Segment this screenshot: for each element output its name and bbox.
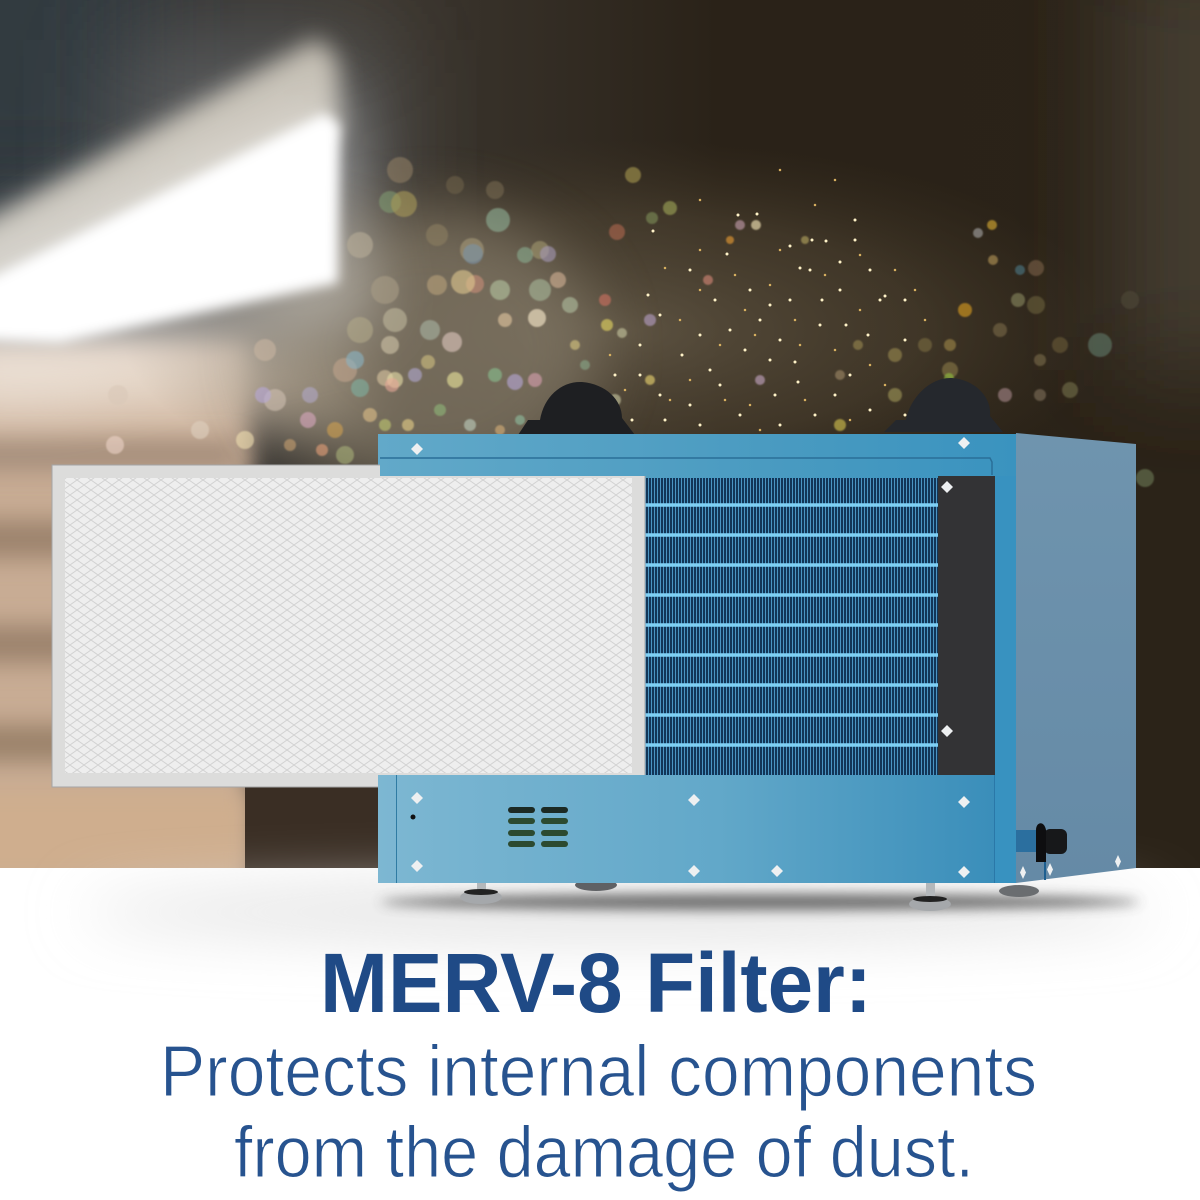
dehumidifier unit [52,378,1136,911]
lower control panel [378,775,995,883]
title: MERV-8 Filter: [320,936,872,1030]
unit side panel [1016,433,1136,883]
vent slots [508,807,568,847]
bokeh dust particles [106,157,1154,487]
description line 2: from the damage of dust. [234,1113,974,1193]
screws [411,437,1121,879]
right front post [995,475,1016,883]
unit front body [378,434,1016,883]
top rail [380,434,1016,476]
feet [460,878,1039,911]
description line 1: Protects internal components [160,1032,1037,1112]
background: dusty room photo [0,0,1200,905]
handle: left [518,382,635,435]
black side panel [938,476,995,776]
handle: right [884,378,1003,432]
coil with fins [645,478,938,775]
MERV-8 filter [52,465,645,787]
drain connector [1016,823,1067,880]
white floor with shadow [0,868,1200,1200]
window light beam [0,38,380,400]
